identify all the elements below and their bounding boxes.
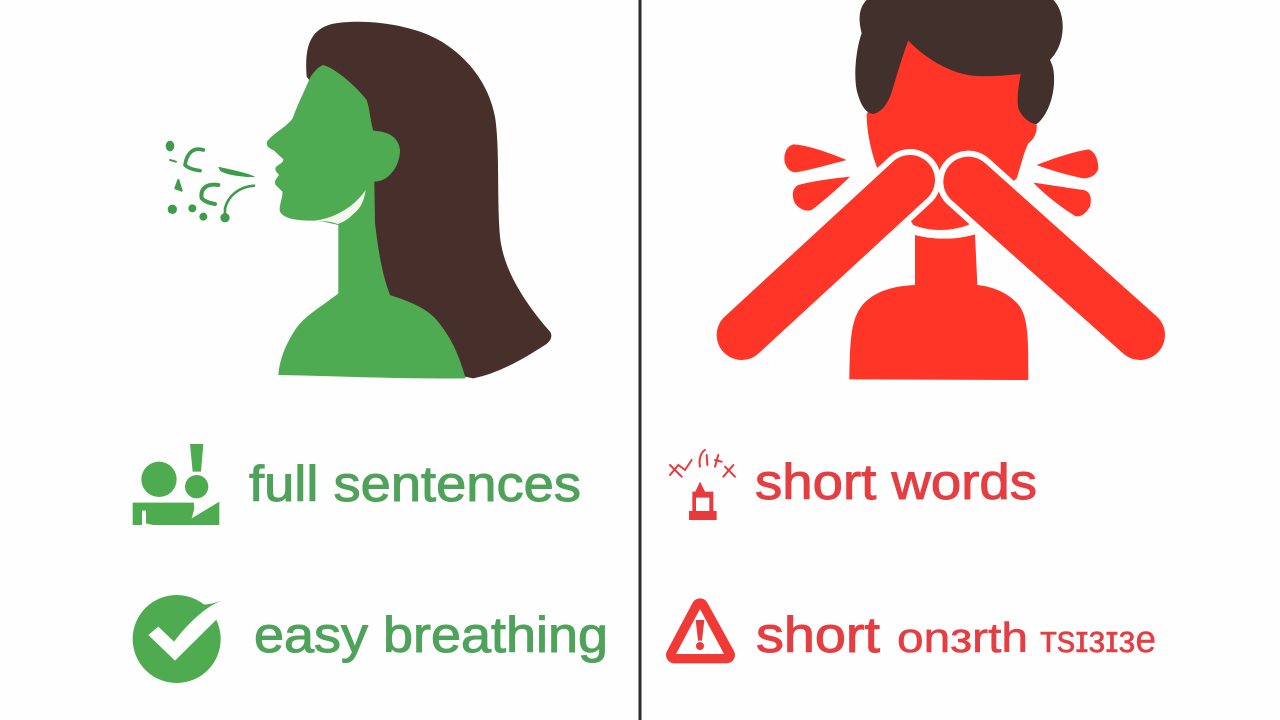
woman hair bbox=[306, 22, 551, 378]
distressed face bbox=[867, 41, 1037, 230]
jaw highlight bbox=[313, 190, 366, 224]
label: short words: short words bbox=[755, 454, 1037, 510]
neck and shoulders bbox=[849, 234, 1028, 380]
illustration: woman breathing easily bbox=[267, 22, 551, 379]
icon: exhaled breath particles bbox=[166, 141, 254, 222]
label: short, garbled text bbox=[756, 607, 1156, 663]
label: short, garbled text: тsɪзɪзe bbox=[1040, 619, 1156, 661]
label: full sentences: full sentences bbox=[249, 456, 581, 512]
label: easy breathing: easy breathing bbox=[254, 607, 608, 663]
center divider line bbox=[638, 0, 642, 720]
left arm bbox=[742, 180, 910, 335]
woman face and torso bbox=[267, 65, 466, 379]
icon: speaking person with exclamation bbox=[133, 444, 219, 525]
label: short, garbled text: onзrth bbox=[897, 614, 1028, 661]
label: short, garbled text: short bbox=[756, 607, 880, 663]
icon: check mark in circle bbox=[133, 595, 221, 683]
right arm bbox=[968, 182, 1140, 335]
distress spark marks bbox=[784, 144, 1098, 216]
icon: warning triangle bbox=[674, 607, 727, 655]
icon: alarm siren bbox=[670, 450, 735, 520]
illustration: person in respiratory distress bbox=[742, 0, 1140, 380]
short hair bbox=[855, 0, 1063, 124]
